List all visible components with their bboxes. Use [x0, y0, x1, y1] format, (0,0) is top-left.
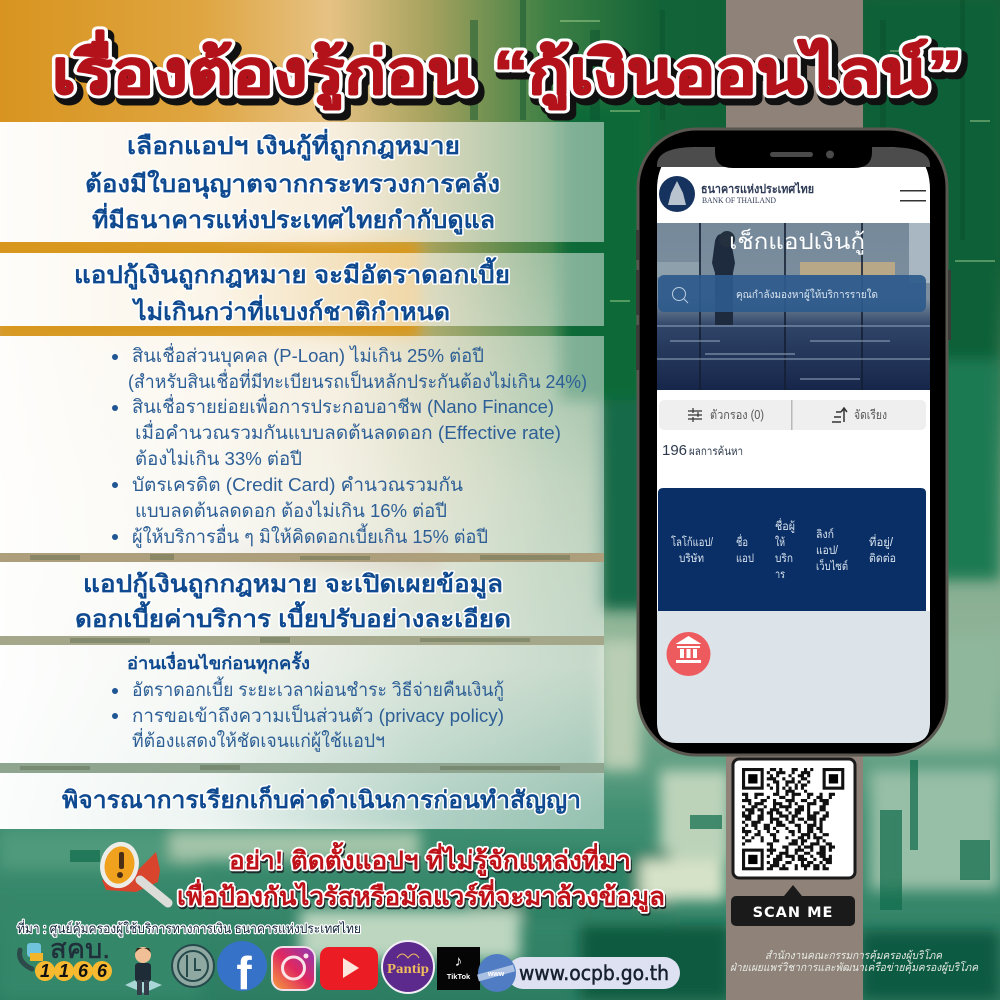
- panel 5: read conditions: [0, 645, 604, 763]
- warning message: เพื่อป้องกันไวรัสหรือมัลแวร์ที่จะมาล้วงข้อมูล: [177, 879, 665, 913]
- logo: hotline 1166: [20, 934, 112, 981]
- icon: youtube: [320, 947, 378, 990]
- table header: แอป: [736, 553, 754, 565]
- panel 4: disclosure heading: [0, 562, 604, 636]
- table header: บริก: [775, 552, 793, 565]
- title: เรื่องต้องรู้ก่อน “กู้เงินออนไลน์”: [52, 30, 962, 110]
- logo: hotline 1166: 6: [78, 961, 89, 981]
- panel 1 heading text: ต้องมีใบอนุญาตจากกระทรวงการคลัง: [85, 169, 500, 200]
- result count: 196: [662, 442, 687, 459]
- table header: [658, 488, 926, 611]
- publisher footer text: ฝ่ายเผยแพร่วิชาการและพัฒนาเครือข่ายคุ้มครองผู้บริโภค: [730, 961, 979, 974]
- conditions bullet list: อัตราดอกเบี้ย ระยะเวลาผ่อนชำระ วิธีจ่ายคืนเงินกู้: [132, 676, 504, 701]
- logo: tiktok: [437, 947, 480, 990]
- center gray vertical strip: [726, 0, 863, 1000]
- logo: tiktok: ♪: [455, 953, 462, 970]
- table header: แอป/: [816, 545, 839, 557]
- logo: agency round seal: [172, 945, 214, 987]
- icon: red bank button: [666, 632, 710, 676]
- table empty body: [657, 611, 930, 743]
- icon: filter sliders: [688, 408, 702, 422]
- search bar: คุณกำลังมองหาผู้ให้บริการรายใด: [736, 288, 878, 301]
- bullet list text: (สำหรับสินเชื่อที่มีทะเบียนรถเป็นหลักประกันต้องไม่เกิน 24%): [128, 369, 587, 392]
- conditions bullet list: ที่ต้องแสดงให้ชัดเจนแก่ผู้ใช้แอปฯ: [132, 728, 385, 752]
- background: tan bands between panels: [0, 553, 604, 773]
- source line: ที่มา : ศูนย์คุ้มครองผู้ใช้บริการทางการเงิน ธนาคารแห่งประเทศไทย: [17, 920, 361, 937]
- sort label: จัดเรียง: [854, 408, 887, 422]
- website pill: [478, 954, 680, 992]
- table header: โลโก้แอป/: [671, 535, 714, 549]
- panel 6 heading text: พิจารณาการเรียกเก็บค่าดำเนินการก่อนทำสัญญา: [62, 785, 581, 814]
- icon: warning magnifier: [99, 841, 168, 903]
- conditions bullet list: การขอเข้าถึงความเป็นส่วนตัว (privacy policy): [132, 703, 504, 726]
- table header: เว็บไซต์: [816, 558, 848, 573]
- bank of thailand header: ธนาคารแห่งประเทศไทย: [701, 181, 814, 196]
- bullet list text: สินเชื่อส่วนบุคคล (P-Loan) ไม่เกิน 25% ต่อปี: [132, 343, 484, 368]
- bullet list text: เมื่อคำนวณรวมกันแบบลดต้นลดดอก (Effective rate): [135, 420, 561, 443]
- logo: hotline 1166: 6: [97, 961, 108, 981]
- title: เรื่องต้องรู้ก่อน “กู้เงินออนไลน์”: [56, 35, 966, 115]
- bullet list text: [112, 343, 587, 548]
- bullet list text: สินเชื่อรายย่อยเพื่อการประกอบอาชีพ (Nano Finance): [132, 394, 554, 417]
- logo: pantip: [382, 941, 434, 993]
- logo: hotline 1166: สคบ.: [50, 934, 110, 964]
- title: [52, 30, 966, 115]
- panel 4 heading text: [75, 571, 511, 633]
- icon: sort: [832, 408, 847, 422]
- filter label: ตัวกรอง (0): [710, 408, 764, 422]
- panel 1 heading text: [85, 128, 500, 235]
- publisher footer text: [730, 949, 979, 974]
- logo: tiktok: TikTok: [447, 972, 471, 981]
- scan me tag: [731, 885, 855, 926]
- website pill: www.ocpb.go.th: [519, 961, 669, 985]
- hero photo: [657, 223, 930, 390]
- bullet list text: บัตรเครดิต (Credit Card) คำนวณรวมกัน: [132, 474, 463, 495]
- phone screen: [657, 147, 930, 743]
- icon: instagram: [272, 947, 315, 990]
- logo: hotline 1166: 1: [59, 961, 69, 981]
- table header: ให้: [775, 536, 785, 549]
- bank of thailand header: BANK OF THAILAND: [702, 195, 776, 205]
- logo: cartoon officer: [125, 947, 162, 995]
- conditions subheading: อ่านเงื่อนไขก่อนทุกครั้ง: [127, 651, 310, 674]
- title: เรื่องต้องรู้ก่อน “กู้เงินออนไลน์”: [52, 30, 962, 110]
- filter and sort bar: [659, 400, 926, 430]
- logo: hotline 1166: 1: [40, 961, 50, 981]
- panel 4 heading text: แอปกู้เงินถูกกฎหมาย จะเปิดเผยข้อมูล: [83, 571, 503, 599]
- bullet list text: ผู้ให้บริการอื่น ๆ มิให้คิดดอกเบี้ยเกิน 15% ต่อปี: [132, 523, 488, 548]
- search bar: [658, 275, 926, 312]
- result count: ผลการค้นหา: [689, 445, 743, 458]
- panel 1: choose legal app: [0, 122, 604, 242]
- table header: ที่อยู่/: [869, 534, 894, 549]
- warning message: อย่า! ติดตั้งแอปฯ ที่ไม่รู้จักแหล่งที่มา: [229, 841, 631, 877]
- bullet list text: แบบลดต้นลดดอก ต้องไม่เกิน 16% ต่อปี: [135, 500, 447, 521]
- bullet list text: ต้องไม่เกิน 33% ต่อปี: [135, 448, 302, 469]
- table header: ติดต่อ: [869, 552, 896, 565]
- warning message: [177, 841, 665, 913]
- phone notch and speaker: [715, 147, 872, 168]
- table header: บริษัท: [679, 552, 704, 565]
- table header: ลิงก์: [816, 527, 834, 541]
- conditions bullet list: [112, 676, 504, 752]
- table header: ชื่อ: [736, 534, 748, 549]
- hero title: เช็กแอปเงินกู้: [729, 227, 865, 255]
- result count: [662, 442, 743, 459]
- scan me tag: SCAN ME: [753, 905, 833, 921]
- panel 4 heading text: ดอกเบี้ยค่าบริการ เบี้ยปรับอย่างละเอียด: [75, 600, 511, 633]
- panel 1 heading text: ที่มีธนาคารแห่งประเทศไทยกำกับดูแล: [92, 202, 495, 235]
- panel 2 heading text: แอปกู้เงินถูกกฎหมาย จะมีอัตราดอกเบี้ย: [74, 256, 510, 290]
- website pill: www: [487, 971, 505, 978]
- panel 2 heading text: [74, 256, 510, 326]
- logo: pantip: Pantip: [387, 962, 429, 977]
- table header: ชื่อผู้: [775, 518, 795, 533]
- panel 2: legal interest rate heading: [0, 253, 604, 326]
- panel 2 heading text: ไม่เกินกว่าที่แบงก์ชาติกำหนด: [131, 294, 450, 326]
- phone mockup: [636, 129, 951, 755]
- panel 3: interest rate bullet list: [0, 336, 604, 553]
- panel 1 heading text: เลือกแอปฯ เงินกู้ที่ถูกกฎหมาย: [127, 128, 460, 161]
- publisher footer text: สำนักงานคณะกรรมการคุ้มครองผู้บริโภค: [765, 949, 943, 962]
- QR code: [733, 759, 855, 878]
- table header: าร: [775, 569, 785, 581]
- icon: facebook: [217, 941, 267, 999]
- icon: facebook: f: [236, 947, 252, 999]
- panel 6: fees before contract: [0, 773, 604, 829]
- bank of thailand header: [659, 176, 926, 212]
